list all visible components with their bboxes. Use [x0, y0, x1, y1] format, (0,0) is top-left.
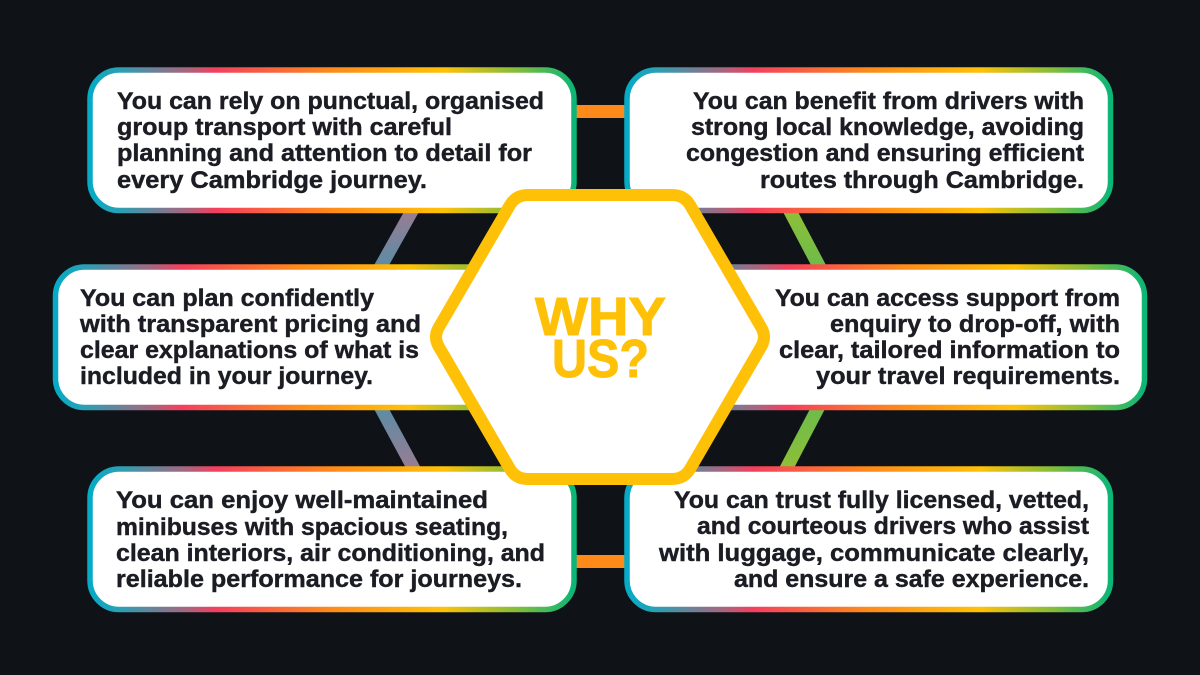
panel: enquiry support: enquiry to drop-off, with: [830, 311, 1120, 338]
panel: transparent pricing: with transparent pricing and: [79, 311, 421, 338]
centre hexagon with heading: US?: [552, 330, 649, 389]
panel: enquiry support: [660, 267, 1144, 408]
panel: punctual transport: group transport with careful: [117, 114, 452, 141]
panel: punctual transport: planning and attention to detail for: [117, 140, 532, 167]
panel: local knowledge: [627, 70, 1110, 210]
panel: local knowledge: You can benefit from drivers with: [693, 88, 1084, 115]
connector: bottom horizontal: [570, 555, 630, 568]
connector: lower left diagonal: [373, 407, 422, 470]
panel: transparent pricing: [56, 267, 540, 408]
panel: enquiry support: your travel requirements.: [816, 363, 1120, 390]
centre hexagon with heading: [436, 195, 764, 479]
panel: licensed drivers: [627, 469, 1110, 610]
panel: well-maintained minibuses: You can enjoy well-maintained: [116, 487, 488, 514]
centre hexagon with heading: WHY: [535, 288, 666, 347]
panel: transparent pricing: included in your journey.: [80, 363, 373, 390]
connector: upper left diagonal: [373, 210, 420, 267]
panel: well-maintained minibuses: minibuses with spacious seating,: [116, 514, 508, 541]
panel: local knowledge: strong local knowledge, avoiding: [691, 114, 1084, 141]
panel: punctual transport: every Cambridge journey.: [117, 167, 427, 194]
panel: local knowledge: routes through Cambridge.: [760, 167, 1084, 194]
panel: well-maintained minibuses: [90, 469, 574, 610]
connector: top horizontal: [570, 105, 630, 118]
panel: licensed drivers: You can trust fully licensed, vetted,: [674, 487, 1089, 514]
panel: enquiry support: You can access support from: [775, 285, 1120, 312]
panel: licensed drivers: with luggage, communicate clearly,: [658, 540, 1089, 567]
panel: licensed drivers: and courteous drivers who assist: [697, 513, 1089, 540]
panel: well-maintained minibuses: clean interiors, air conditioning, and: [116, 540, 545, 567]
panel: local knowledge: congestion and ensuring efficient: [686, 140, 1084, 167]
panel: licensed drivers: and ensure a safe experience.: [734, 566, 1089, 593]
panel: well-maintained minibuses: reliable performance for journeys.: [116, 566, 522, 593]
connector: upper right diagonal: [782, 210, 827, 267]
panel: punctual transport: You can rely on punctual, organised: [117, 88, 544, 115]
panel: enquiry support: clear, tailored information to: [779, 337, 1120, 364]
panel: punctual transport: [90, 70, 574, 210]
panel: transparent pricing: You can plan confidently: [80, 285, 374, 312]
connector: lower right diagonal: [778, 407, 826, 470]
panel: transparent pricing: clear explanations of what is: [80, 337, 419, 364]
